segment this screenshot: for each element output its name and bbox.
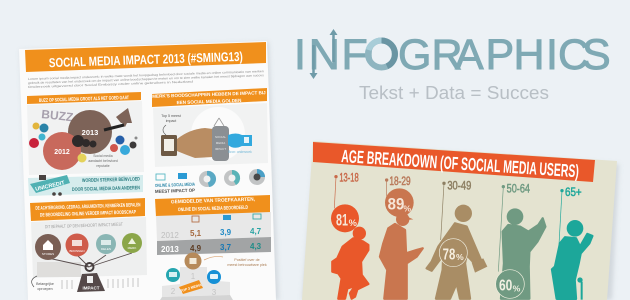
- left section heading: BUZZ OP SOCIAL MEDIA GROOT ALS HET GOED GAAT: [39, 95, 129, 104]
- row 2012: 3,9: [220, 228, 232, 237]
- podium: [160, 252, 267, 300]
- group 30-49: %: [456, 252, 464, 262]
- poster intro text: Lorem ipsum social media impact onderzoek: in welke mate wordt het koopgedrag beïnvloed door sociale media en online communicatie van merken: [28, 69, 264, 81]
- punching bag: IMPACT: [215, 147, 226, 151]
- factor: brown: STORES: [42, 252, 54, 256]
- row 2012: 4,7: [250, 227, 262, 236]
- group 13-18: [331, 171, 368, 299]
- group 50-64: 60: [499, 278, 512, 295]
- pale arrows: [62, 278, 138, 289]
- podium note: [227, 258, 267, 267]
- tagline: Tekst + Data = Succes: [359, 83, 549, 103]
- age title banner: [313, 142, 595, 182]
- icon: up arrow in N: [330, 29, 338, 62]
- group 13-18: 81: [336, 210, 348, 229]
- ribbon text: DOOR SOCIAL MEDIA DAN ANDEREN: [72, 185, 140, 193]
- orange band: left: [30, 198, 145, 221]
- row 2012: 5,1: [190, 229, 202, 238]
- pie 2: [224, 170, 240, 186]
- panel: teal band with ribbon: [28, 175, 143, 196]
- right section heading: EEN SOCIAL MEDIA GOLDEN: [176, 98, 242, 105]
- orange band: left: DE BEOORDELING ONLINE VERDER IMPACT BOODSCHAP: [40, 209, 136, 219]
- group 30-49: 30-49: [447, 178, 472, 192]
- group 50-64: [496, 182, 545, 299]
- row 2013: 4,3: [250, 242, 262, 251]
- panel: boxing illustration: [153, 103, 268, 167]
- group 18-29: 18-29: [389, 174, 411, 188]
- group 65+: 65+: [565, 185, 582, 199]
- panel: impact diagram: DIT BEPAALT OP DEN BEHOORT IMPACT MEEST: [45, 222, 123, 229]
- orange band: right: [155, 195, 270, 217]
- buzz note: [88, 154, 118, 168]
- row 2012: [161, 227, 262, 240]
- panel: online media pies: MEEST IMPACT OP: [155, 188, 195, 194]
- right section heading: MERK'S BOODSCHAPPEN HEBBEN DE IMPACT BIJ: [152, 90, 266, 99]
- panel: impact diagram: [31, 217, 147, 292]
- poster title banner: SOCIAL MEDIA IMPACT 2013 (#SMING13): [49, 49, 243, 70]
- group 18-29: %: [403, 203, 411, 213]
- panel: age breakdown poster: [302, 141, 619, 300]
- device icon teal: [156, 174, 165, 180]
- factor: green: MERK: [128, 246, 136, 250]
- brown boxing glove: [177, 128, 213, 158]
- icon: down arrow in N: [310, 45, 318, 79]
- group 13-18: %: [349, 218, 358, 228]
- ribbon: UNICREDIT: [35, 180, 66, 193]
- text block: [37, 262, 81, 277]
- 2012 circle: 2012: [54, 149, 70, 156]
- note: [36, 282, 54, 291]
- podium note: Positief over de: [234, 258, 260, 262]
- group 18-29: [380, 174, 423, 299]
- poster title banner: [25, 42, 266, 72]
- factor: red: BRONNEN: [69, 249, 85, 253]
- buzz note: Social media: [93, 154, 113, 158]
- yellow icon: [78, 154, 86, 162]
- black social blob: [72, 135, 96, 148]
- punching bag: [212, 118, 229, 161]
- megaphone: [104, 108, 132, 130]
- note: oproepen: [37, 287, 53, 291]
- row 2013: 3,7: [220, 243, 232, 252]
- first place icon: [184, 252, 202, 270]
- podium note: meest betrouwbare plek: [227, 263, 267, 267]
- panel: online media pies: [155, 169, 265, 194]
- podium: 2: [171, 287, 176, 296]
- buzz note: aandacht beïnvloed: [88, 159, 118, 163]
- group 30-49: [427, 178, 487, 299]
- 2013 circle: 2013: [82, 128, 98, 137]
- panel: online media pies: ONLINE & SOCIAL MEDIA: [155, 182, 196, 188]
- podium: 1: [191, 272, 196, 281]
- poster intro text: [28, 69, 264, 89]
- ribbon text: [72, 175, 140, 193]
- second place icon: [166, 268, 180, 282]
- group 30-49: 78: [443, 246, 455, 263]
- orange band: right: GEMIDDELDE VAN TROEFKAARTEN,: [171, 197, 256, 205]
- group 13-18: 13-18: [339, 171, 359, 185]
- impact weight: IMPACT: [83, 286, 100, 290]
- group 50-64: 50-64: [507, 182, 530, 196]
- row 2013: [161, 242, 262, 254]
- orange band: right: ONLINE EN SOCIAL MEDIA BEOORDEELD: [178, 205, 248, 213]
- icon: donut O: [368, 40, 395, 68]
- factor: teal: DELEN: [101, 247, 111, 251]
- buzz note: reputatie: [96, 164, 110, 168]
- device cuff: [161, 135, 177, 156]
- panel: buzz bubbles: [27, 101, 144, 175]
- panel: social media impact poster: [19, 41, 279, 300]
- handwritten note: impact: [166, 119, 176, 123]
- group 18-29: 89: [388, 194, 404, 213]
- row 2013: 4,9: [190, 244, 202, 253]
- ribbon text: WORDEN STERKER BEÏNVLOED: [82, 175, 140, 184]
- punching bag: MEDIA: [216, 141, 225, 145]
- group 65+: [552, 185, 592, 300]
- hub: [86, 263, 94, 271]
- group 50-64: %: [513, 283, 521, 293]
- buzz word: BUZZ: [41, 107, 74, 124]
- orange band: left: DE ACHTERGROND, GEDRAG, ARGUMENTEN, KENMERKEN BEPALEN: [35, 202, 141, 212]
- handwritten note: [161, 114, 181, 123]
- third place icon: [207, 270, 221, 284]
- device icon blue: [178, 173, 187, 179]
- podium: 3: [212, 288, 217, 297]
- connector lines: [48, 253, 132, 267]
- pie 1: [199, 171, 216, 187]
- blue glove: [228, 134, 252, 148]
- pie 3: [249, 169, 265, 185]
- handwritten note: Top 5 meest: [161, 114, 181, 118]
- row 2013: 2013: [161, 245, 179, 254]
- right section heading: [152, 88, 267, 107]
- orange tag: TOP 3 MEDIA: [180, 283, 203, 293]
- poster intro text: Onderzoek uitgevoerd door Social Embassy onder online gebruikers in Nederland: [28, 80, 193, 89]
- punching bag: SOCIAL: [215, 135, 226, 139]
- left section heading: [27, 92, 141, 104]
- panel: boxing illustration: Bron: onderzoek: [228, 150, 252, 154]
- table: scores 2012 vs 2013: [156, 212, 271, 255]
- social icons left: [29, 122, 48, 148]
- chart: age silhouettes: [331, 171, 592, 300]
- note: Belangrijke: [36, 282, 54, 286]
- social icons right: [110, 136, 138, 155]
- logo: INFOGRAPHICS: INFOGRAPHICS: [294, 31, 611, 79]
- poster intro text: gebruik de resultaten van het onderzoek om de impact van online boodschappen te meten en om te zien welke kanalen het meest bijdragen aan succes: [28, 73, 264, 85]
- row 2012: 2012: [161, 231, 179, 240]
